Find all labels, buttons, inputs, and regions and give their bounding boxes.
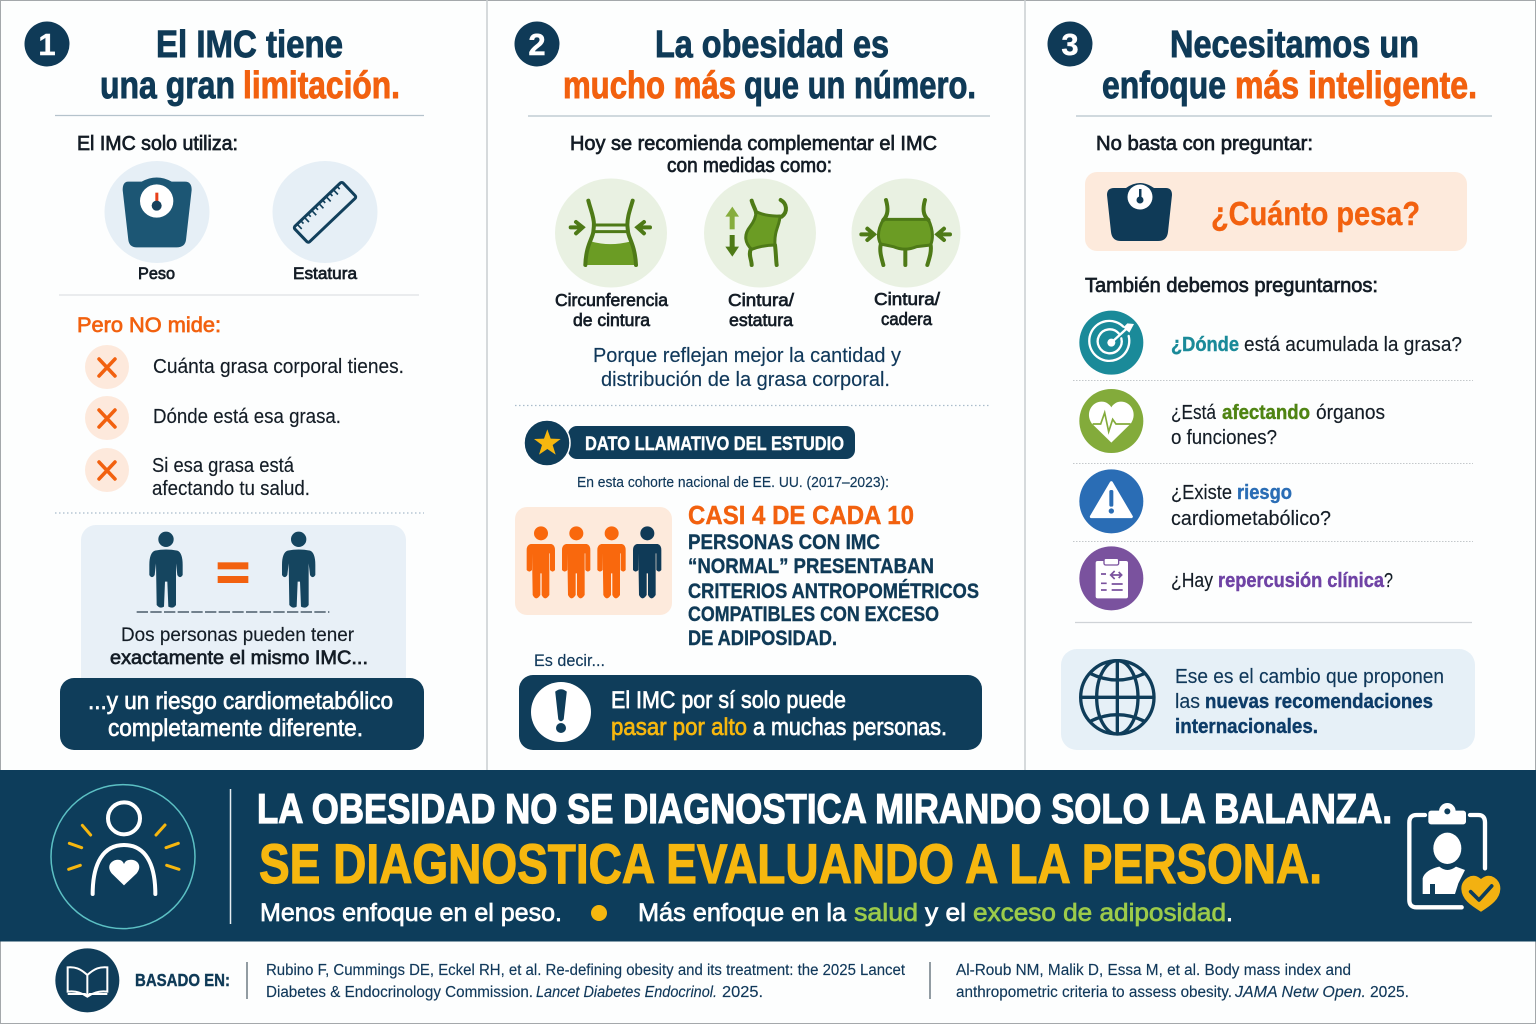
question: afectando: o funciones? — [1171, 427, 1277, 449]
icon: clipboard with person and heart check — [1409, 803, 1502, 913]
callout: pasar por alto: pasar por alto — [611, 714, 747, 741]
icon: cintura / estatura: estatura — [729, 310, 793, 330]
question: riesgo: cardiometabólico? — [1171, 508, 1331, 530]
question: riesgo — [1079, 469, 1331, 533]
icon: ruler, Estatura — [272, 161, 378, 283]
statistic: casi 4 de cada 10: DE ADIPOSIDAD. — [688, 626, 837, 650]
statistic: casi 4 de cada 10: CRITERIOS ANTROPOMÉTRICOS — [688, 578, 979, 603]
text: porque reflejan — [593, 344, 902, 391]
reference 1: Lancet Diabetes Endocrinol. — [536, 984, 717, 1001]
reference 2: JAMA Netw Open. — [1234, 984, 1366, 1001]
reference 2: 2025. — [1370, 984, 1409, 1001]
list item: grasa corporal — [85, 345, 404, 389]
callout: recomendaciones internacionales: las — [1175, 691, 1200, 713]
icon: ruler, Estatura: Estatura — [293, 264, 358, 283]
icon: cintura / cadera: cadera — [881, 309, 932, 329]
question: repercusión clínica: ¿Hay — [1171, 570, 1213, 592]
callout: same BMI comparison — [81, 525, 406, 695]
question: repercusión clínica: repercusión clínica — [1218, 570, 1385, 592]
icon: open book — [55, 948, 119, 1012]
list item: afectando tu salud: Si esa grasa está — [152, 455, 295, 477]
callout: recomendaciones internacionales: internacionales. — [1175, 716, 1318, 738]
conclusion line 3: salud — [854, 899, 918, 927]
heading panel 2: mucho más — [563, 65, 736, 107]
question: dónde: está acumulada la grasa? — [1244, 334, 1462, 356]
heading panel 3: enfoque — [1102, 65, 1226, 107]
text: porque reflejan: Porque reflejan mejor la cantidad y — [593, 344, 902, 367]
conclusion line 3: y el — [925, 899, 966, 927]
heading panel 1: una gran — [100, 65, 235, 107]
heading panel 3: Necesitamos un — [1170, 24, 1419, 66]
banner: conclusión — [0, 770, 1536, 942]
callout: pasar por alto: El IMC por sí solo puede — [611, 687, 846, 714]
conclusion line 3: exceso de adiposidad — [973, 899, 1226, 927]
icon: cintura / estatura: Cintura/ — [728, 290, 794, 310]
statistic: casi 4 de cada 10: COMPATIBLES CON EXCESO — [688, 602, 939, 626]
pictogram: 3 of 4 people — [515, 507, 672, 615]
statistic: casi 4 de cada 10: CASI 4 DE CADA 10 — [688, 500, 914, 530]
question: riesgo: ¿Existe — [1171, 482, 1232, 504]
icon: cintura / estatura — [704, 178, 816, 330]
callout: riesgo diferente — [60, 678, 424, 750]
statistic: casi 4 de cada 10: PERSONAS CON IMC — [688, 530, 880, 554]
callout: recomendaciones internacionales — [1061, 649, 1475, 750]
conclusion line 3: . — [1226, 899, 1233, 927]
conclusion line 3: Más enfoque en la — [638, 899, 846, 927]
statistic: casi 4 de cada 10 — [688, 500, 979, 650]
text: porque reflejan: distribución de la grasa corporal. — [601, 368, 890, 391]
icon: person with heart — [51, 785, 195, 929]
callout: same BMI comparison: Dos personas pueden tener — [121, 625, 355, 646]
number badge 2: 2 — [528, 27, 546, 62]
number badge 3: 3 — [1061, 27, 1079, 62]
text: El IMC solo utiliza: El IMC solo utiliza: — [77, 133, 238, 155]
list item: afectando tu salud: afectando tu salud. — [152, 478, 310, 500]
question: afectando — [1079, 389, 1385, 453]
icon: dark scale — [1107, 183, 1172, 241]
footer: fuentes — [55, 948, 1409, 1012]
callout: pasar por alto — [519, 675, 982, 750]
callout: cuánto pesa — [1085, 172, 1467, 251]
reference 1: 2025. — [722, 984, 763, 1001]
icon: circunferencia de cintura — [555, 178, 668, 330]
statistic: casi 4 de cada 10: “NORMAL” PRESENTABAN — [688, 554, 934, 578]
heading panel 1: limitación. — [243, 65, 400, 107]
text: también debemos preguntarnos: También debemos preguntarnos: — [1085, 275, 1378, 297]
panel: La obesidad es mucho más que un número — [514, 22, 990, 750]
panel: El IMC tiene una gran limitación — [24, 22, 424, 750]
text: medidas complementarias: Hoy se recomienda complementar el IMC — [570, 133, 937, 155]
icon: circunferencia de cintura: Circunferencia — [555, 290, 668, 310]
conclusion line 2: SE DIAGNOSTICA EVALUANDO A LA PERSONA. — [259, 832, 1322, 895]
reference 2: anthropometric criteria to assess obesity. — [956, 984, 1232, 1001]
conclusion line 3: Menos enfoque en el peso. — [260, 899, 562, 927]
heading panel 1: El IMC tiene — [156, 24, 343, 66]
callout: recomendaciones internacionales: nuevas recomendaciones — [1205, 691, 1433, 713]
number badge 2 — [514, 22, 560, 66]
icon: circunferencia de cintura: de cintura — [573, 310, 650, 330]
text: medidas complementarias — [570, 133, 937, 177]
question: dónde: ¿Dónde — [1171, 334, 1239, 356]
callout: riesgo diferente: ...y un riesgo cardiometabólico — [88, 688, 393, 715]
callout: recomendaciones internacionales: Ese es el cambio que proponen — [1175, 666, 1444, 688]
question: afectando: órganos — [1316, 402, 1385, 424]
heading panel 2: que un número. — [744, 65, 976, 107]
heading panel 2: La obesidad es — [655, 24, 889, 66]
reference 1: Rubino F, Cummings DE, Eckel RH, et al. Re-defining obesity and its treatment: the 2025 Lancet — [266, 962, 906, 979]
badge: dato llamativo: DATO LLAMATIVO DEL ESTUDIO — [585, 433, 844, 455]
number badge 1: 1 — [38, 27, 56, 62]
text: no basta con preguntar: No basta con preguntar: — [1096, 133, 1313, 155]
list item: afectando tu salud — [85, 448, 310, 500]
callout: cuánto pesa: ¿Cuánto pesa? — [1211, 195, 1420, 232]
heading panel 1 — [100, 24, 400, 107]
icon: cintura / cadera — [852, 178, 960, 329]
reference 1: Diabetes & Endocrinology Commission. — [266, 984, 533, 1001]
reference 2: Al-Roub NM, Malik D, Essa M, et al. Body mass index and — [956, 962, 1351, 979]
list item: dónde está la grasa — [85, 396, 341, 440]
icon: two people equal — [137, 532, 329, 612]
question: repercusión clínica: ? — [1384, 570, 1393, 592]
icon: globe — [1081, 661, 1154, 734]
heading panel 3: más inteligente. — [1235, 65, 1477, 107]
callout: riesgo diferente: completamente diferente. — [108, 715, 363, 742]
icon: cintura / cadera: Cintura/ — [874, 289, 940, 309]
panel: Necesitamos un enfoque más inteligente — [1048, 22, 1492, 750]
reference 2 — [956, 962, 1409, 1001]
list item: grasa corporal: Cuánta grasa corporal tienes. — [153, 356, 404, 378]
text: cohorte: En esta cohorte nacional de EE. UU. (2017–2023): — [577, 475, 889, 491]
question: afectando: afectando — [1222, 402, 1310, 424]
number badge 1 — [24, 22, 70, 66]
question: dónde — [1079, 311, 1462, 375]
label: basado en: BASADO EN: — [135, 970, 230, 990]
callout: pasar por alto: a muchas personas. — [753, 714, 947, 741]
callout: same BMI comparison: exactamente el mismo IMC... — [110, 648, 368, 669]
text: medidas complementarias: con medidas como: — [667, 155, 832, 177]
badge: dato llamativo — [524, 420, 855, 466]
conclusion line 3 — [260, 899, 1233, 927]
question: riesgo: riesgo — [1237, 482, 1292, 504]
heading: Pero NO mide: Pero NO mide: — [77, 314, 221, 337]
reference 1 — [266, 962, 906, 1001]
icon: scale, Peso — [104, 161, 210, 283]
icon: scale, Peso: Peso — [138, 264, 175, 283]
text: es decir: Es decir... — [534, 652, 605, 670]
heading panel 2 — [563, 24, 976, 107]
question: afectando: ¿Está — [1171, 402, 1217, 424]
heading panel 3 — [1102, 24, 1477, 107]
number badge 3 — [1048, 22, 1092, 66]
question: repercusión clínica — [1079, 546, 1393, 610]
list item: dónde está la grasa: Dónde está esa grasa. — [153, 406, 341, 428]
